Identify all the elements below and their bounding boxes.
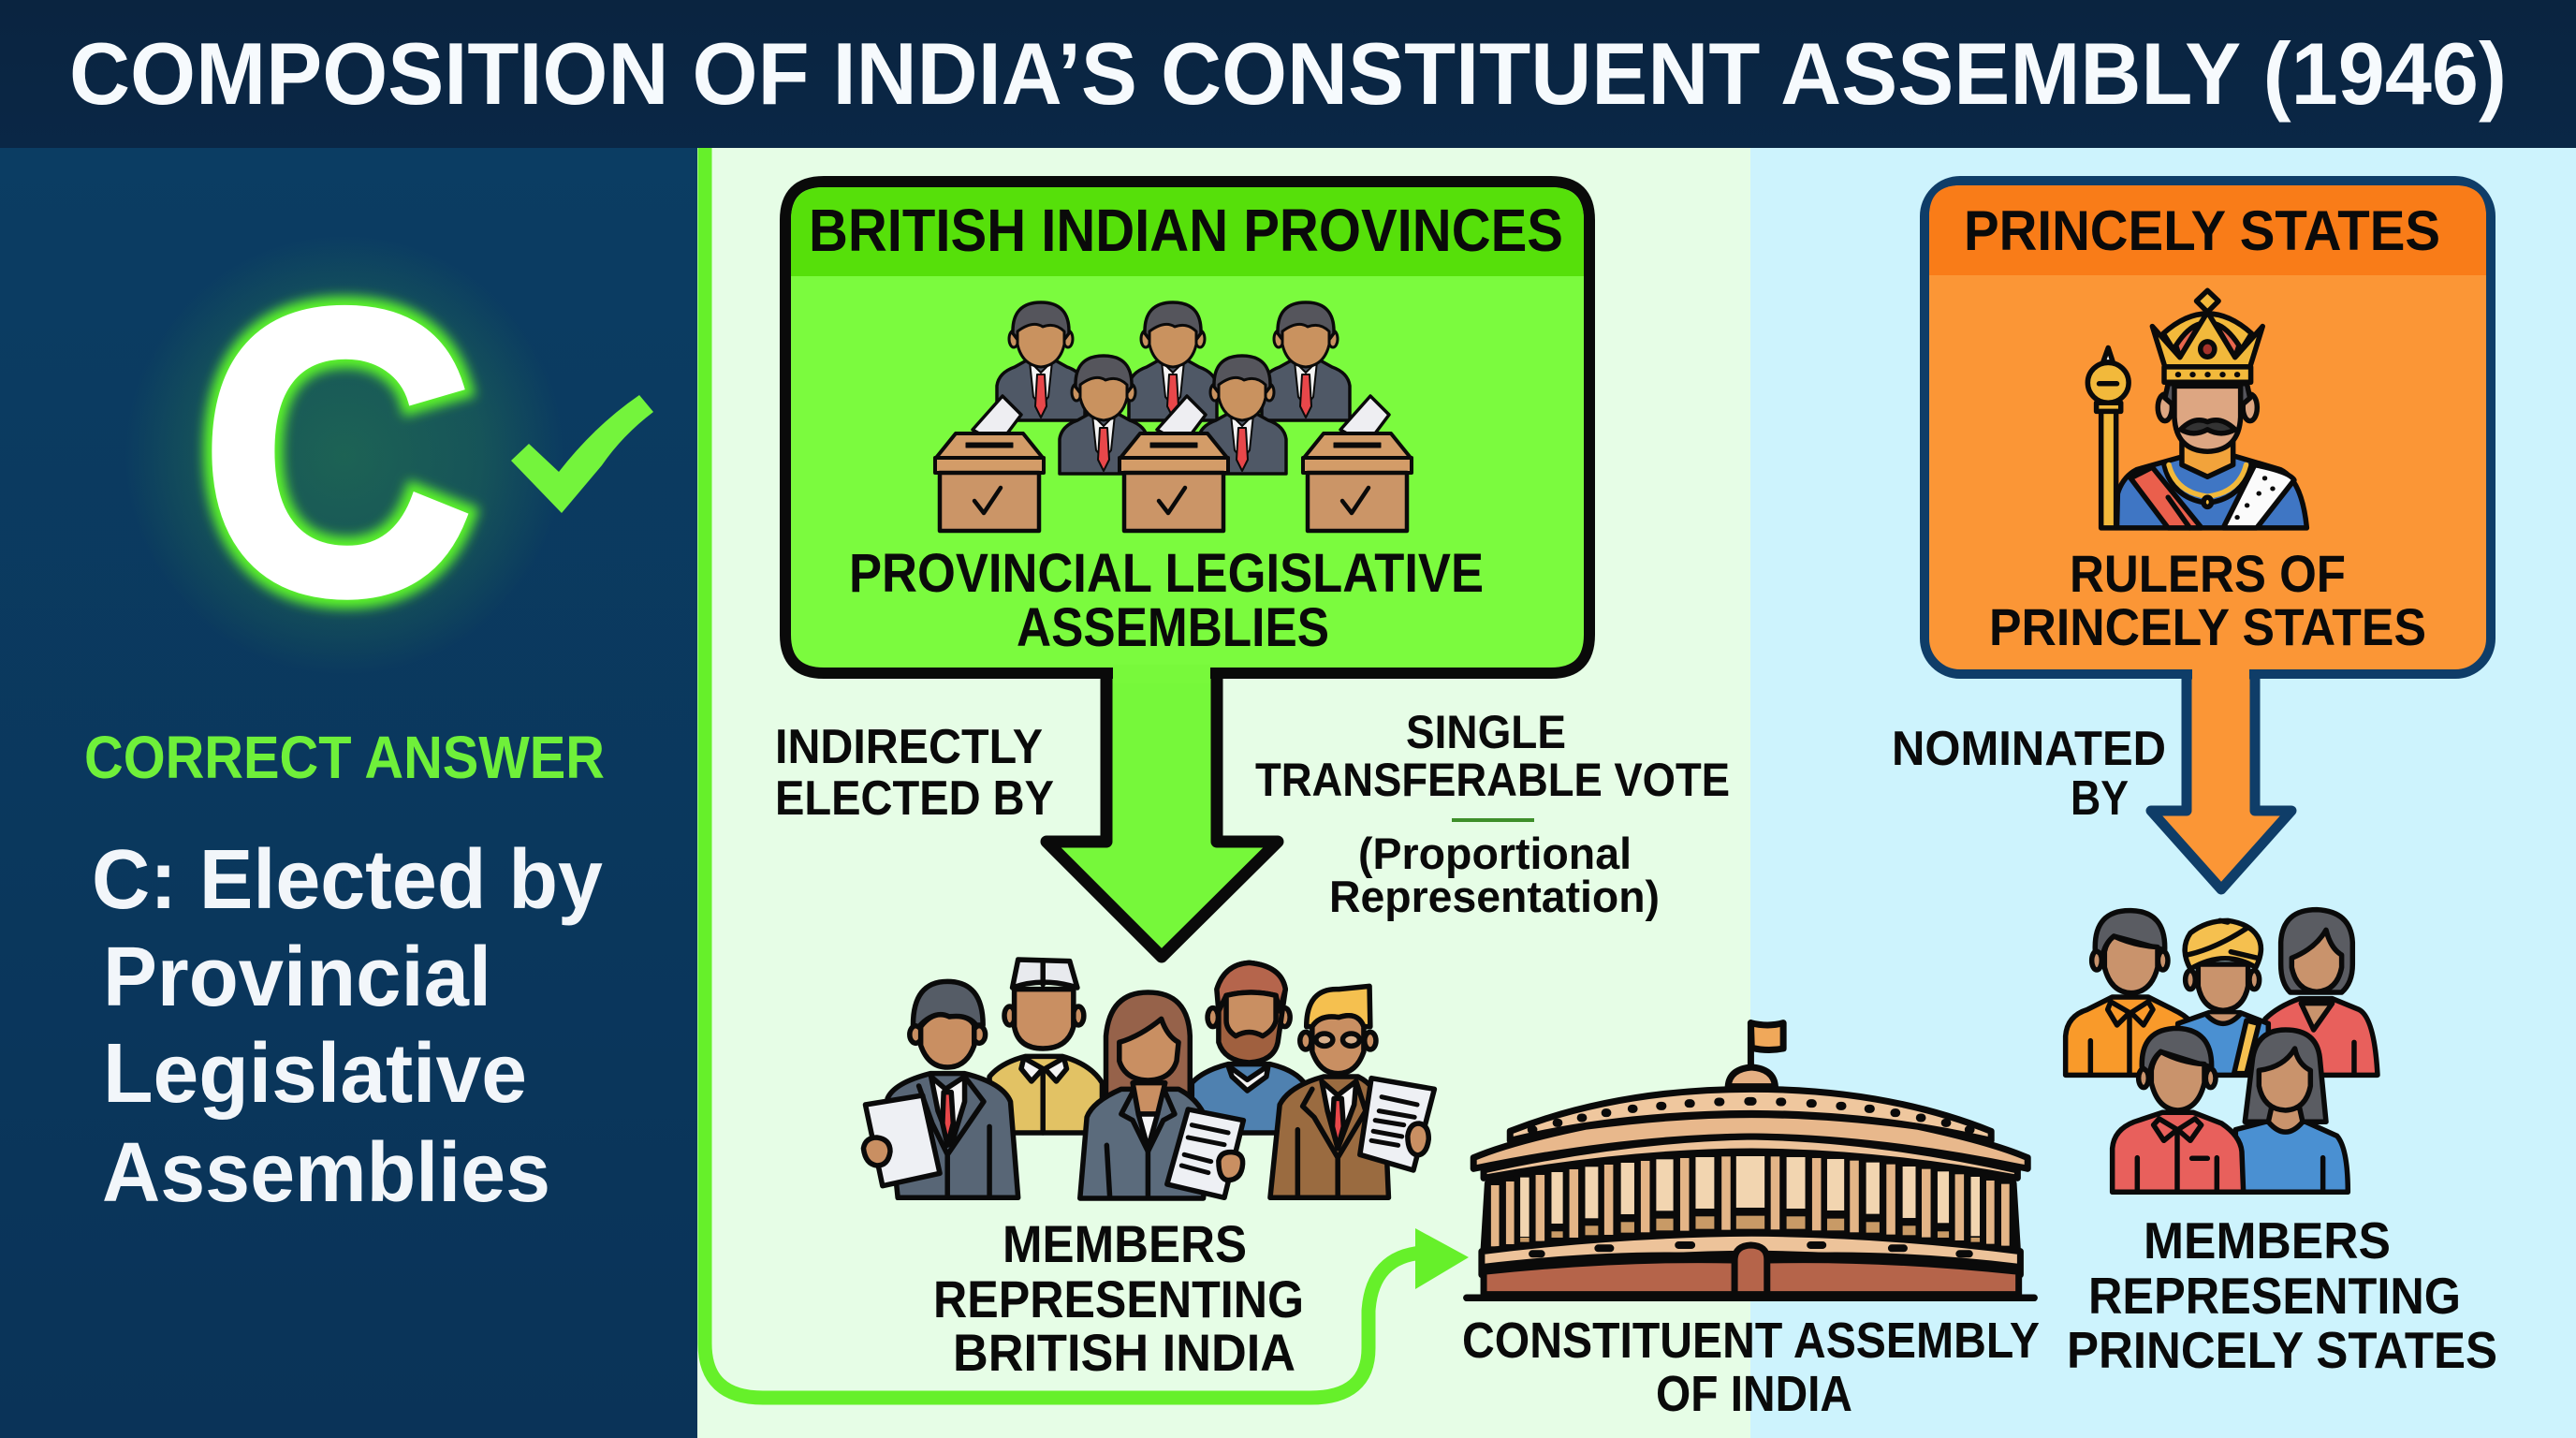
sceptre xyxy=(2087,348,2129,528)
title banner xyxy=(0,0,2576,148)
icon: glowing letter C: C xyxy=(200,226,474,678)
label: provincial legislative assemblies: ASSEMBLIES xyxy=(1017,597,1329,658)
orange arrow down xyxy=(2151,674,2291,889)
answer text xyxy=(92,833,603,1220)
label: indirectly elected by xyxy=(775,720,1054,826)
answer text: C: Elected by xyxy=(92,833,603,927)
icon: glowing letter C xyxy=(124,226,564,678)
label: members representing princely states: PRINCELY STATES xyxy=(2067,1321,2497,1379)
box body xyxy=(1925,181,2491,674)
box body xyxy=(785,182,1589,673)
label: single transferable vote: Representation) xyxy=(1329,872,1660,921)
label: nominated by: BY xyxy=(2071,771,2129,826)
woman with document xyxy=(1080,992,1243,1198)
person with cap and yellow shirt xyxy=(989,960,1102,1133)
arrow neck joins box xyxy=(2192,667,2249,682)
correct answer heading: CORRECT ANSWER xyxy=(84,724,605,791)
arrow neck joins box xyxy=(1113,665,1210,683)
label: provincial legislative assemblies: PROVINCIAL LEGISLATIVE xyxy=(849,543,1484,604)
man in turban xyxy=(2178,920,2268,1075)
answer text: Provincial xyxy=(103,931,491,1024)
label: single transferable vote: SINGLE xyxy=(1406,706,1566,758)
panel: correct answer xyxy=(0,148,697,1438)
label: members representing princely states: MEMBERS xyxy=(2144,1211,2391,1269)
flag xyxy=(1728,1023,1783,1087)
label: nominated by: NOMINATED xyxy=(1892,722,2166,776)
woman in pink xyxy=(2259,910,2378,1075)
label: nominated by xyxy=(1892,722,2166,826)
man in grey suit with paper xyxy=(863,981,1018,1197)
man in orange shirt xyxy=(2066,911,2197,1075)
label: single transferable vote: (Proportional xyxy=(1358,829,1632,878)
blond man in brown suit with document xyxy=(1270,986,1434,1197)
icon: parliament building xyxy=(1467,1023,2034,1298)
label: constituent assembly of India xyxy=(1462,1313,2040,1422)
header band xyxy=(791,187,1584,276)
label: constituent assembly of India: OF INDIA xyxy=(1656,1366,1852,1422)
header band xyxy=(1929,185,2486,275)
panel: British Indian Provinces xyxy=(785,182,1589,957)
upper drum xyxy=(1510,1089,1991,1140)
icon: glowing letter C: C xyxy=(200,226,474,678)
label: members representing British India xyxy=(933,1214,1304,1382)
colonnade xyxy=(1484,1156,2017,1250)
arrow: green path from provinces to constituent assembly xyxy=(705,148,1469,1398)
heading: PRINCELY STATES xyxy=(1964,199,2440,262)
woman in blue xyxy=(2235,1030,2348,1192)
label: single transferable vote xyxy=(1255,706,1730,921)
answer text: Assemblies xyxy=(102,1126,550,1220)
title: COMPOSITION OF INDIA’S CONSTITUENT ASSEMBLY (1946) xyxy=(69,24,2507,123)
label: rulers of princely states: PRINCELY STATES xyxy=(1989,597,2426,656)
label: rulers of princely states: RULERS OF xyxy=(2070,544,2346,603)
heading: BRITISH INDIAN PROVINCES xyxy=(809,197,1563,264)
panel: Princely States xyxy=(1925,181,2491,889)
label: indirectly elected by: INDIRECTLY xyxy=(775,720,1043,774)
label: members representing British India: BRITISH INDIA xyxy=(953,1323,1295,1382)
label: single transferable vote: TRANSFERABLE VOTE xyxy=(1255,754,1730,806)
label: indirectly elected by: ELECTED BY xyxy=(775,771,1054,826)
label: provincial legislative assemblies xyxy=(849,543,1484,658)
eaves xyxy=(1473,1115,2027,1178)
green arrow down xyxy=(1046,669,1278,957)
answer text: Legislative xyxy=(103,1027,527,1121)
icon: green check mark xyxy=(511,395,653,513)
label: members representing princely states xyxy=(2067,1211,2497,1379)
label: rulers of princely states xyxy=(1989,544,2426,656)
ruler figure xyxy=(2116,384,2306,528)
label: members representing British India: REPRESENTING xyxy=(933,1269,1304,1328)
label: members representing British India: MEMBERS xyxy=(1003,1214,1247,1273)
label: constituent assembly of India: CONSTITUENT ASSEMBLY xyxy=(1462,1313,2040,1369)
icon: members representing princely states xyxy=(2066,910,2378,1192)
man in red shirt xyxy=(2113,1028,2244,1192)
icon: members representing British India xyxy=(863,960,1434,1198)
panel: right light blue background xyxy=(1750,148,2576,1438)
crown xyxy=(2152,290,2262,382)
icon: crowned ruler with sceptre xyxy=(2087,290,2306,528)
icon: legislators with ballot boxes xyxy=(935,302,1412,531)
label: members representing princely states: REPRESENTING xyxy=(2088,1267,2461,1325)
person with beard and blue sweater xyxy=(1192,962,1307,1133)
base xyxy=(1467,1233,2034,1298)
